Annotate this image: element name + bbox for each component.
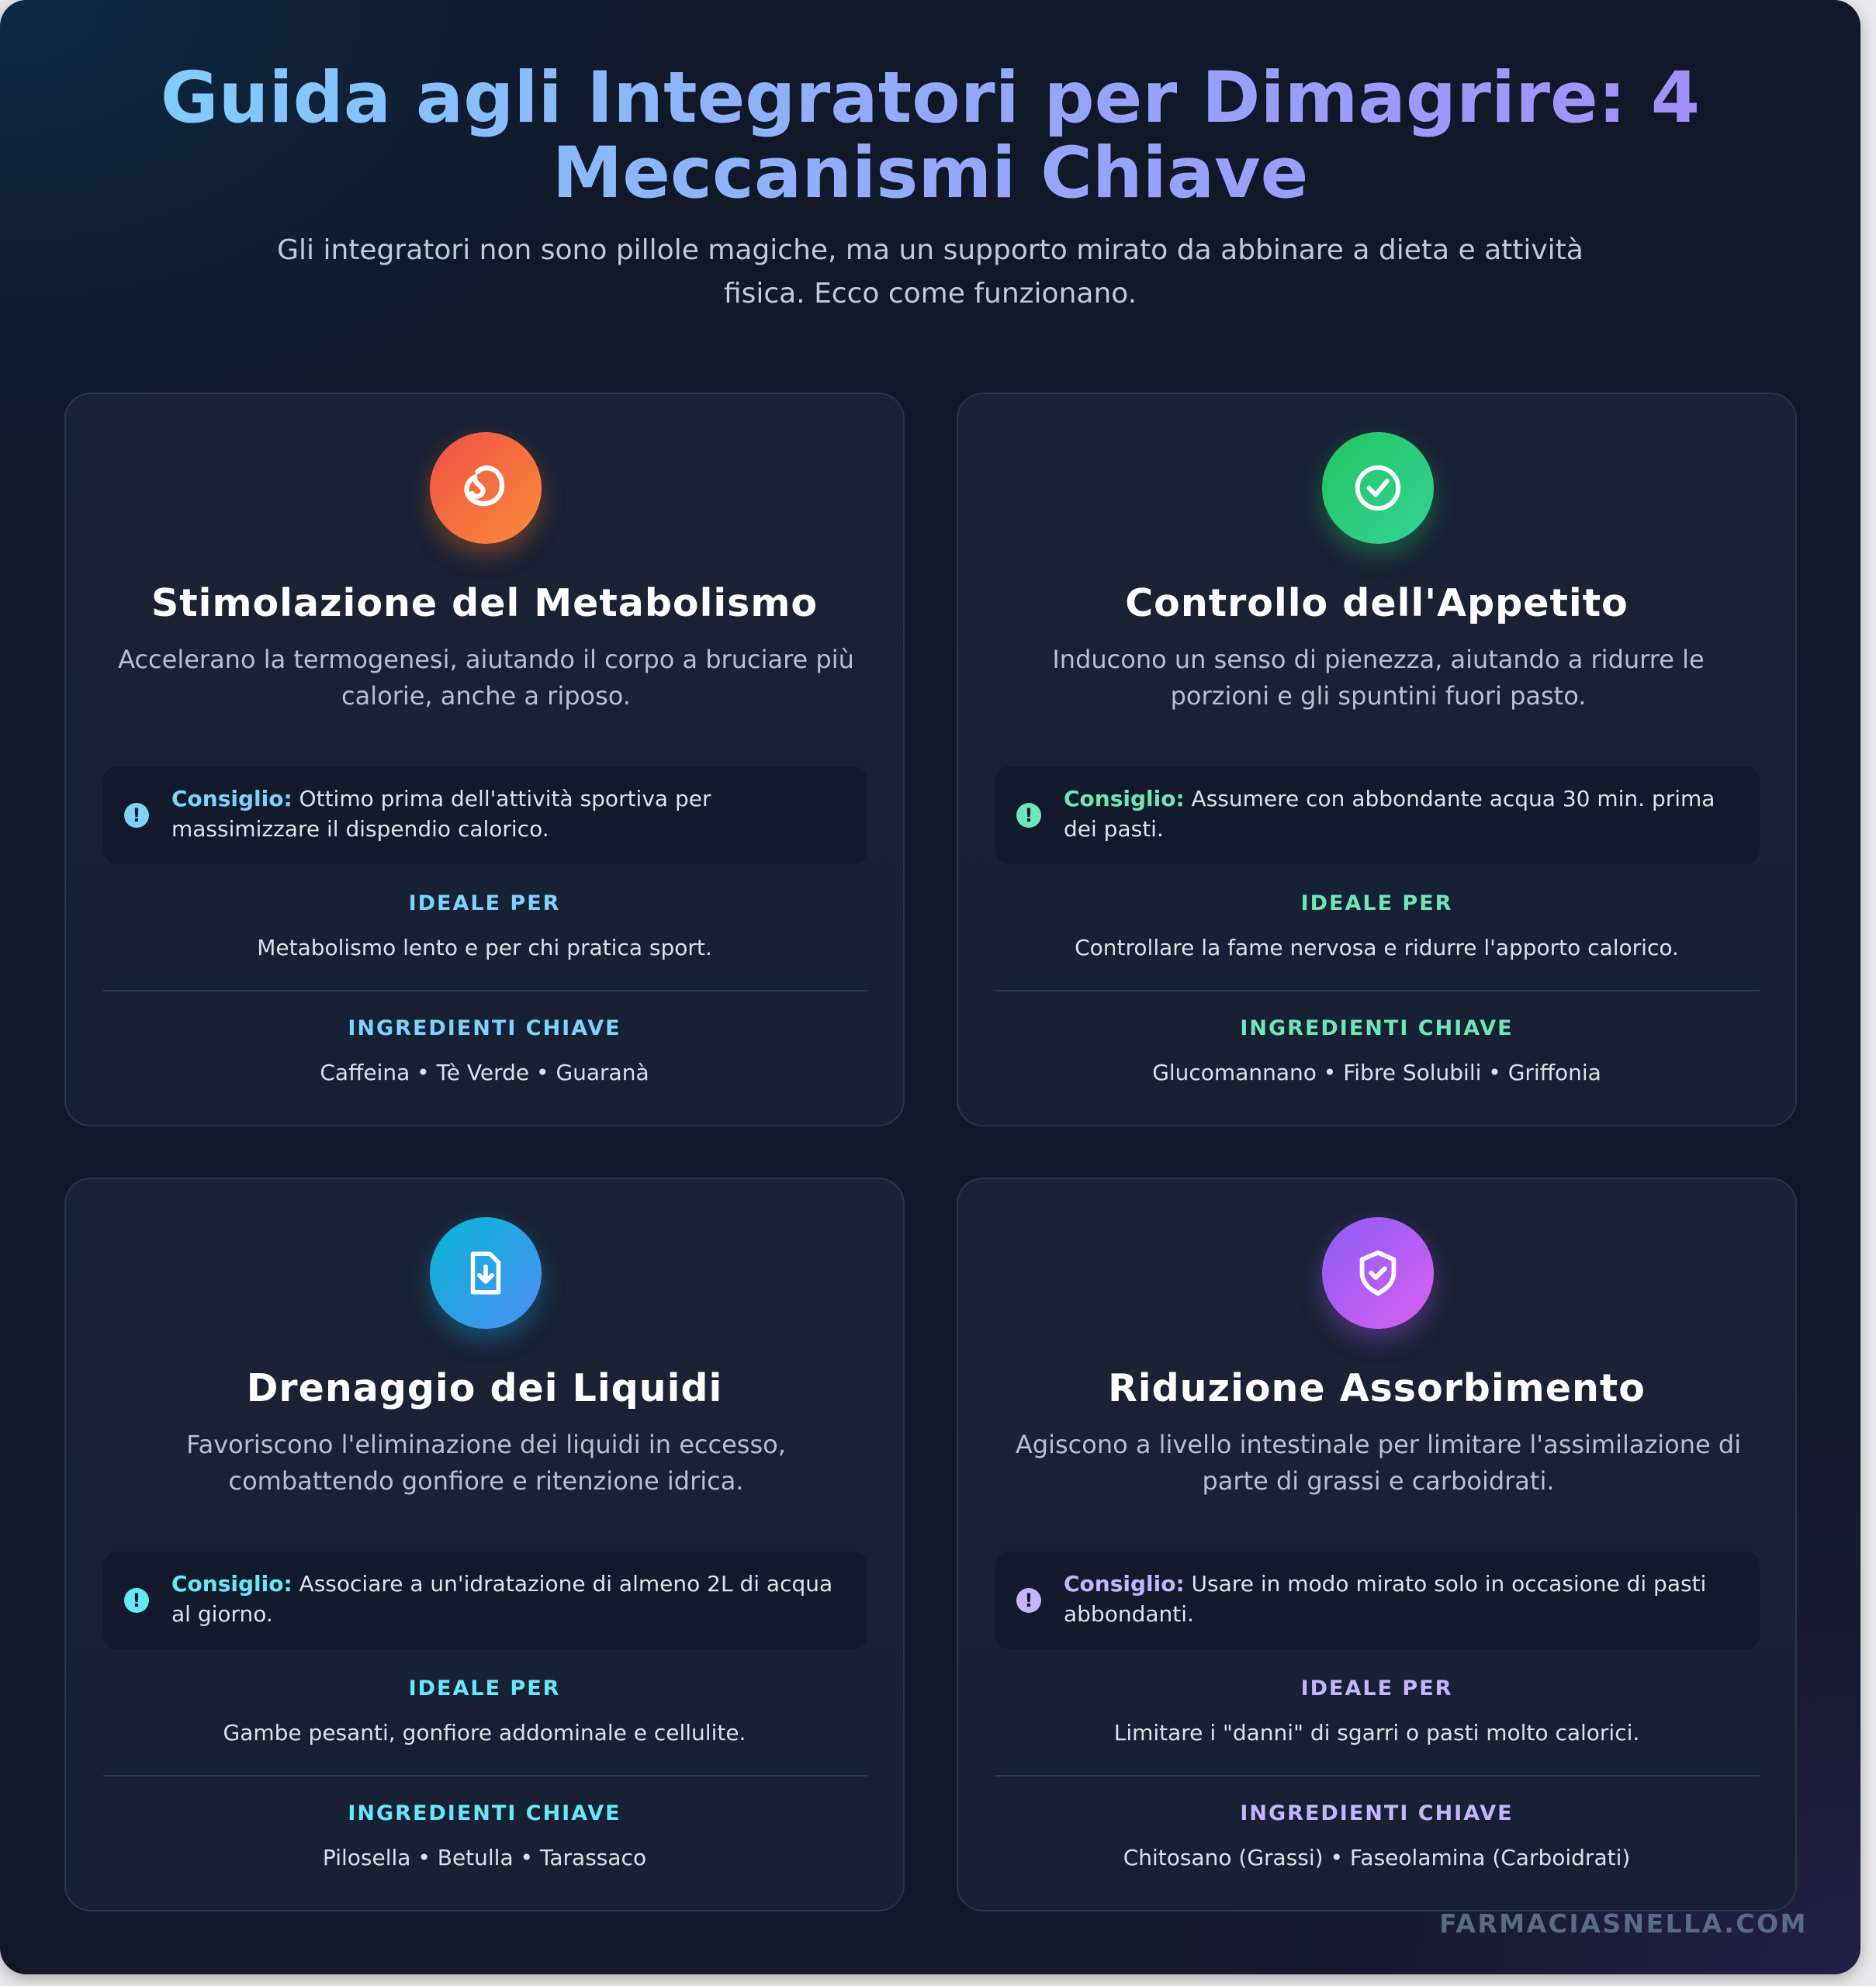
tip box <box>103 766 867 864</box>
tip box: ! <box>1025 804 1033 826</box>
tip box: Consiglio: Usare in modo mirato solo in occasione di pasti abbondanti. <box>1064 1571 1706 1627</box>
subtitle: Gli integratori non sono pillole magiche, ma un supporto mirato da abbinare a dieta e attività fisica. Ecco come funzionano. <box>277 234 1584 310</box>
ideale per: IDEALE PER <box>1301 1676 1452 1701</box>
description: Agiscono a livello intestinale per limitare l'assimilazione di parte di grassi e carboidrati. <box>1016 1430 1741 1496</box>
panel: assorbimento: Limitare i "danni" di sgarri o pasti molto calorici. <box>1114 1720 1639 1746</box>
panel: appetito: Glucomannano • Fibre Solubili • Griffonia <box>1152 1060 1601 1085</box>
icon: shield <box>1322 1217 1434 1329</box>
ingredienti: INGREDIENTI CHIAVE <box>348 1801 621 1825</box>
ideale per: IDEALE PER <box>409 891 560 915</box>
tip box: Consiglio: Ottimo prima dell'attività sportiva per massimizzare il dispendio calorico. <box>171 786 711 842</box>
tip box: Consiglio: Assumere con abbondante acqua 30 min. prima dei pasti. <box>1064 786 1715 842</box>
card title: Controllo dell'Appetito <box>1125 581 1629 625</box>
panel: drenaggio: Pilosella • Betulla • Tarassaco <box>323 1845 646 1870</box>
panel: appetito <box>957 393 1797 1126</box>
panel: metabolismo <box>64 393 905 1126</box>
ingredienti: INGREDIENTI CHIAVE <box>1240 1016 1514 1040</box>
tip box: ! <box>133 804 140 826</box>
tip box: ! <box>1025 1590 1033 1611</box>
tip box: ! <box>133 1590 140 1611</box>
panel: drenaggio: Gambe pesanti, gonfiore addominale e cellulite. <box>223 1720 746 1746</box>
panel: metabolismo: Caffeina • Tè Verde • Guaranà <box>320 1060 649 1085</box>
tip box <box>995 1552 1760 1649</box>
ingredienti: INGREDIENTI CHIAVE <box>348 1016 621 1040</box>
ideale per: IDEALE PER <box>1301 891 1452 915</box>
panel: appetito: Controllare la fame nervosa e ridurre l'apporto calorico. <box>1075 935 1679 960</box>
card title: Riduzione Assorbimento <box>1108 1366 1646 1410</box>
ingredienti: INGREDIENTI CHIAVE <box>1240 1801 1514 1825</box>
panel: assorbimento: Chitosano (Grassi) • Faseolamina (Carboidrati) <box>1123 1845 1630 1870</box>
title: Guida agli Integratori per Dimagrire: 4 <box>161 57 1700 139</box>
tip box <box>995 766 1760 864</box>
tip box <box>103 1552 867 1649</box>
title: Meccanismi Chiave <box>552 133 1308 214</box>
panel: assorbimento <box>957 1178 1797 1912</box>
tip box: Consiglio: Associare a un'idratazione di almeno 2L di acqua al giorno. <box>171 1571 832 1627</box>
panel: metabolismo: Metabolismo lento e per chi pratica sport. <box>257 935 712 960</box>
description: Inducono un senso di pienezza, aiutando a ridurre le porzioni e gli spuntini fuori pasto. <box>1052 645 1705 711</box>
card title: Drenaggio dei Liquidi <box>247 1366 722 1410</box>
footer brand: FARMACIASNELLA.COM <box>1439 1908 1808 1939</box>
icon: flame <box>430 432 542 544</box>
description: Favoriscono l'eliminazione dei liquidi in eccesso, combattendo gonfiore e ritenzione idrica. <box>186 1430 786 1496</box>
card title: Stimolazione del Metabolismo <box>151 581 818 625</box>
panel: drenaggio <box>64 1178 905 1912</box>
ideale per: IDEALE PER <box>409 1676 560 1701</box>
title <box>0 61 1860 211</box>
description: Accelerano la termogenesi, aiutando il corpo a bruciare più calorie, anche a riposo. <box>118 645 854 711</box>
icon: download doc <box>430 1217 542 1329</box>
icon: check <box>1322 432 1434 544</box>
